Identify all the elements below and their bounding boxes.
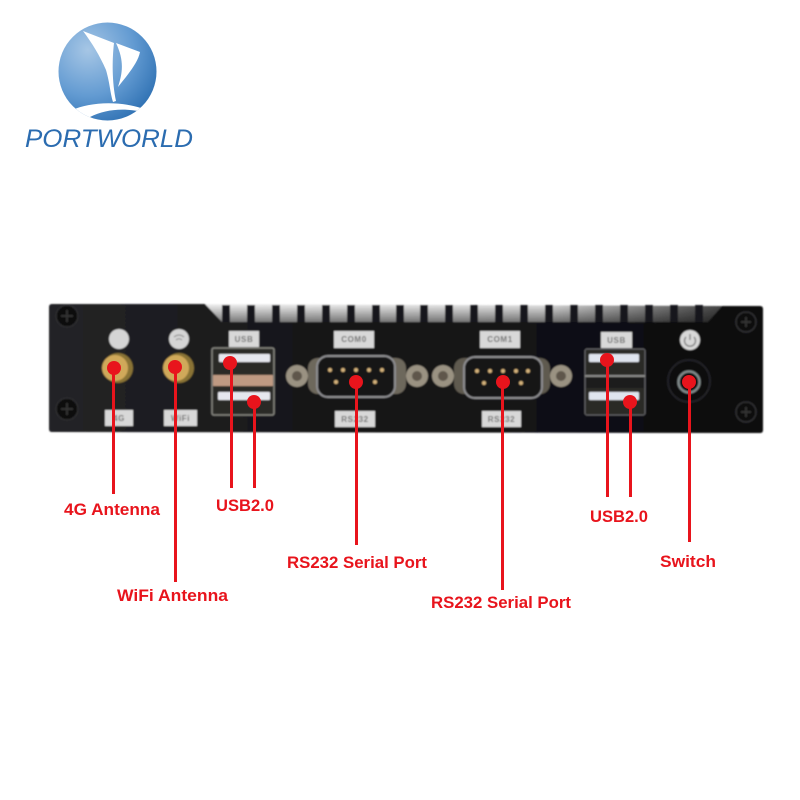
- callout: RS232 Serial Port right: RS232 Serial Port: [431, 593, 571, 612]
- callout: WiFi Antenna: WiFi Antenna: [117, 586, 229, 605]
- label: COM0: [334, 331, 374, 348]
- USB stack right: [585, 349, 645, 415]
- device faceplate: [49, 304, 763, 433]
- callout: WiFi Antenna: [117, 360, 229, 605]
- label: USB left: USB: [235, 335, 253, 344]
- callout: 4G Antenna: 4G Antenna: [64, 500, 161, 519]
- label: COM0: COM0: [341, 335, 367, 344]
- serial port COM1: [432, 357, 572, 398]
- label: RS232 left: [335, 411, 375, 427]
- label: RS232 right: [482, 411, 521, 427]
- logo globe with sail: [56, 22, 156, 125]
- label: 4G: 4G: [113, 414, 125, 423]
- callout: Switch: [660, 375, 716, 571]
- callout: USB2.0 left: [216, 356, 274, 515]
- callout: RS232 Serial Port left: RS232 Serial Port: [287, 553, 427, 572]
- logo: Portworld: [25, 22, 193, 153]
- callout: USB2.0 left: USB2.0: [216, 496, 274, 515]
- callout: USB2.0 right: USB2.0: [590, 507, 648, 526]
- callout: Switch: Switch: [660, 552, 716, 571]
- callout: RS232 Serial Port right: [431, 375, 571, 612]
- callout: USB2.0 right: [590, 353, 648, 526]
- label: RS232 left: RS232: [341, 415, 369, 424]
- icon: 4G antenna badge: [109, 329, 129, 349]
- USB stack left: [212, 348, 274, 415]
- label: RS232 right: RS232: [488, 415, 515, 424]
- screws: [56, 305, 756, 422]
- callout: 4G Antenna: [64, 361, 161, 519]
- callout: RS232 Serial Port left: [287, 375, 427, 572]
- label: USB left: [229, 331, 259, 347]
- serial port COM0: [286, 356, 428, 397]
- power switch: [668, 360, 710, 402]
- panel: device rear: [49, 304, 763, 433]
- label: USB right: [601, 332, 632, 348]
- label: WiFi: [164, 410, 197, 426]
- label: 4G: [105, 410, 133, 426]
- 4G SMA connector: [102, 353, 133, 383]
- label: WiFi: WiFi: [171, 414, 190, 423]
- heat-sink fins: [205, 304, 722, 324]
- icon: power badge: [680, 330, 700, 350]
- label: COM1: COM1: [487, 335, 513, 344]
- label: USB right: USB: [607, 336, 626, 345]
- label: COM1: [480, 331, 520, 348]
- icon: WiFi badge: [169, 329, 189, 349]
- logo wordmark: PORTWORLD: [25, 125, 193, 153]
- WiFi SMA connector: [163, 353, 194, 383]
